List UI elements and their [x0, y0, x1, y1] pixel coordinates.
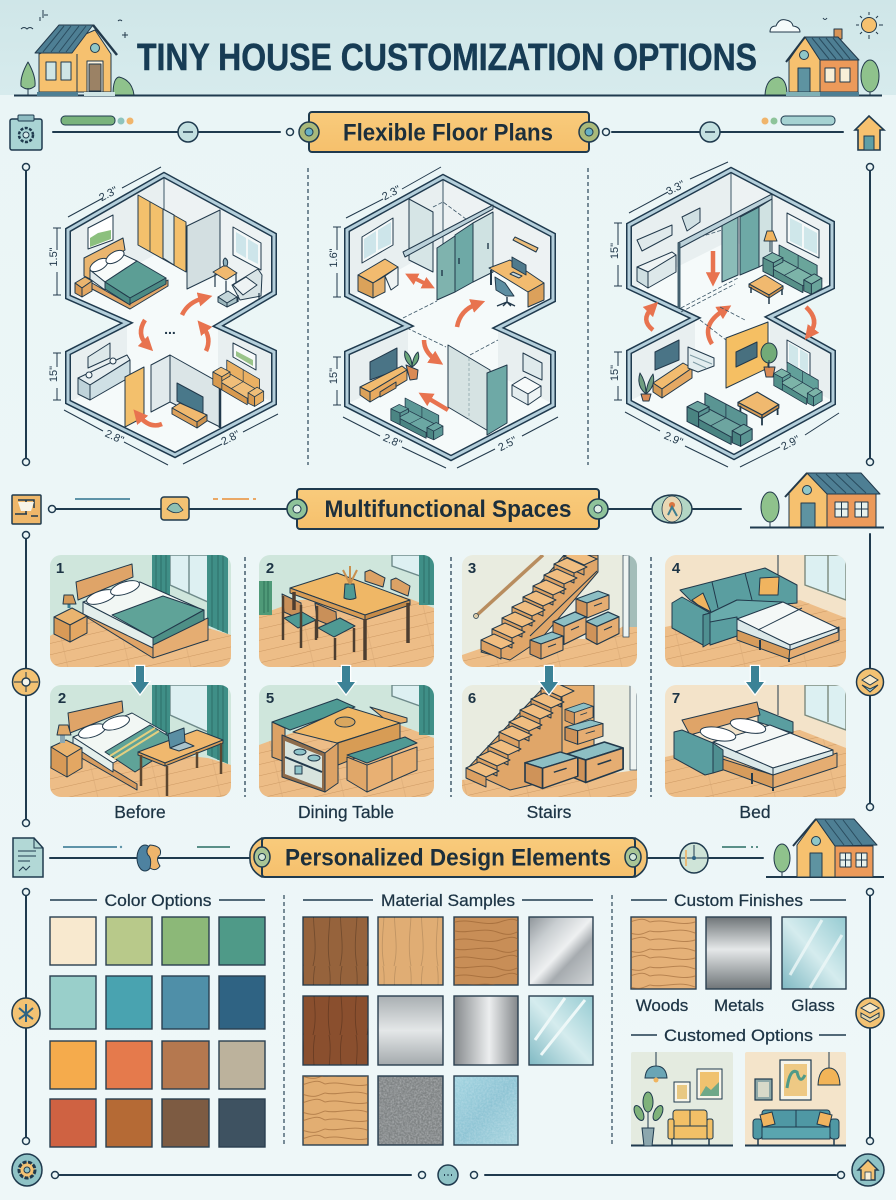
partition with door	[151, 355, 220, 428]
dimensions plan 3: 2.9"	[779, 434, 802, 453]
side table	[213, 258, 237, 292]
footer rail	[12, 1154, 884, 1186]
floor plan 1	[48, 167, 278, 465]
window	[233, 227, 261, 270]
stair body	[481, 555, 598, 660]
panel captions: Before	[114, 802, 166, 822]
painting	[88, 215, 113, 249]
heading: Customed Options: Customed Options	[664, 1026, 813, 1045]
panel captions: Stairs	[527, 802, 572, 822]
back partition	[409, 199, 433, 272]
window	[362, 218, 393, 263]
panel 2: bed with desk	[50, 685, 231, 797]
painting lower	[233, 343, 256, 370]
wall tv	[655, 340, 679, 370]
heading: Material Samples: Material Samples	[381, 891, 515, 910]
back chairs	[365, 570, 410, 596]
dimensions plan 1: 1.5"	[48, 247, 60, 267]
nightstand	[54, 595, 87, 642]
pendant lamp	[818, 1052, 840, 1085]
icon: small house	[855, 116, 884, 150]
base and mattress	[699, 716, 837, 791]
finish labels	[636, 996, 835, 1015]
header band	[0, 0, 896, 96]
color swatches	[50, 917, 265, 1147]
transformation arrows	[131, 666, 764, 694]
stool	[218, 291, 237, 307]
panel 4: dining table storage: 5	[266, 690, 274, 707]
dimensions plan 2	[328, 167, 558, 468]
panel 4: dining table storage	[259, 685, 434, 797]
drawers	[530, 591, 619, 659]
floor plan 3	[609, 162, 839, 467]
icon: document	[13, 838, 43, 877]
medallion: dots	[438, 1165, 458, 1185]
finish labels: Woods	[636, 996, 688, 1015]
treads	[466, 682, 574, 787]
guide dashes	[403, 202, 498, 355]
plant left	[639, 373, 654, 401]
dimensions plan 2: 2.8"	[381, 432, 404, 451]
panel 7: sofa	[665, 555, 846, 667]
dimensions plan 1: 15"	[48, 366, 60, 382]
tv	[172, 383, 207, 428]
dimensions plan 2: 1.6"	[328, 248, 340, 268]
heading: Color Options: Color Options	[104, 891, 212, 910]
panel captions: Dining Table	[298, 802, 394, 822]
window lower	[787, 340, 810, 377]
frames	[674, 1069, 722, 1102]
title: TINY HOUSE CUSTOMIZATION OPTIONS	[137, 37, 757, 79]
panel 7: sofa: 4	[672, 560, 681, 577]
medallion: color blob	[137, 845, 161, 871]
sofa upper	[763, 245, 822, 294]
medallion left	[161, 497, 189, 520]
big sofa	[687, 393, 752, 446]
medallion: left compass	[12, 668, 40, 696]
sofa	[668, 1110, 713, 1145]
finish labels: Glass	[791, 996, 835, 1015]
side rails: design elements	[12, 888, 884, 1145]
side rails: spaces	[12, 532, 884, 826]
banner: Personalized Design Elements: Personalized Design Elements	[285, 844, 611, 872]
icon: house and tree	[750, 473, 884, 528]
panel captions	[114, 802, 771, 822]
dimensions plan 3: 3.3"	[664, 179, 687, 198]
dividers and side rails: floor plans	[22, 164, 874, 466]
banner: Multifunctional Spaces: Multifunctional Spaces	[324, 496, 572, 523]
frames	[755, 1060, 811, 1100]
front chair	[315, 603, 355, 660]
mirror and vanity	[512, 353, 542, 405]
dimensions plan 3: 15"	[609, 243, 621, 259]
bed	[76, 564, 208, 658]
medallion: right layers	[856, 998, 884, 1028]
teal sofa	[391, 398, 443, 440]
panel 6: stairs open: 6	[468, 690, 476, 707]
sofa lower right	[774, 362, 822, 406]
room scene: cream	[745, 1052, 846, 1146]
armchair	[232, 269, 262, 302]
panel 5: stairs: 3	[468, 560, 476, 577]
desk	[138, 728, 223, 796]
panel 1: bed before	[50, 555, 231, 667]
accent partition	[726, 322, 768, 388]
rotation arrows: ...	[164, 321, 176, 337]
vase	[343, 566, 357, 600]
orange sofa	[213, 360, 264, 406]
pendant lamp	[645, 1052, 667, 1082]
kitchen	[637, 208, 700, 288]
sliding doors	[678, 194, 772, 312]
partition	[187, 210, 220, 289]
panel 8: sofa bed: 7	[672, 690, 680, 707]
finish swatches	[631, 917, 846, 989]
medallion: left leaf	[12, 998, 40, 1028]
dimensions plan 2: 15"	[328, 368, 340, 384]
sofa	[672, 568, 797, 647]
dimensions plan 1: 2.8"	[219, 429, 242, 448]
plant	[632, 1092, 665, 1146]
dimensions plan 3: 15"	[609, 365, 621, 381]
treads	[481, 550, 597, 659]
material samples	[303, 917, 593, 1145]
banner: Personalized Design Elements	[250, 838, 647, 877]
icon: floor plan tile	[12, 495, 41, 524]
section band: Multifunctional Spaces	[12, 473, 884, 529]
dimensions plan 3: 2.9"	[662, 430, 685, 449]
plant right	[761, 343, 777, 377]
medallion: compass dial	[680, 843, 708, 873]
icon: left house	[21, 10, 134, 96]
vanity	[78, 343, 130, 400]
finish labels: Metals	[714, 996, 764, 1015]
dimensions plan 1	[48, 167, 278, 465]
panel 3: dining table: 2	[266, 560, 274, 577]
panel 1: bed before: 1	[56, 560, 64, 577]
backrest	[682, 702, 793, 735]
slider beam	[403, 205, 493, 257]
panel captions: Bed	[739, 802, 771, 822]
panel 8: sofa bed	[665, 685, 846, 797]
stair body	[468, 690, 562, 790]
banner: Multifunctional Spaces	[287, 489, 608, 529]
shelf unit	[282, 735, 338, 792]
icon: home	[852, 1154, 884, 1186]
arrows plan 3	[646, 251, 814, 344]
icon: clipboard gear	[10, 115, 42, 150]
plant	[405, 351, 419, 380]
nightstand	[51, 725, 82, 777]
coffee table lower	[738, 392, 779, 425]
drawers	[525, 703, 623, 788]
window	[787, 213, 819, 258]
office chair	[495, 277, 515, 306]
back bench	[272, 699, 355, 762]
sofa	[753, 1110, 839, 1145]
bed	[84, 238, 168, 309]
glass shelf	[688, 347, 714, 372]
arrows plan 2	[412, 277, 480, 410]
front bench	[347, 737, 417, 792]
handrail	[474, 555, 543, 618]
icon: gear	[12, 1154, 42, 1186]
tv and stand	[360, 348, 407, 402]
table	[290, 573, 410, 660]
medallion: right layers	[856, 668, 884, 696]
icon: house and tree	[766, 819, 884, 877]
rotation arrows	[139, 298, 208, 425]
sliding doors	[437, 212, 493, 300]
dimensions plan 2: 2.3"	[380, 184, 403, 203]
bed	[68, 701, 180, 790]
dimensions plan 1: 2.8"	[103, 428, 126, 447]
floor plan 2	[328, 167, 558, 468]
right desk	[489, 237, 544, 307]
lower partition	[448, 345, 507, 435]
sliding door	[125, 367, 144, 427]
tv stand	[653, 363, 692, 398]
panel 3: dining table	[259, 555, 434, 667]
panel 2: bed with desk: 2	[58, 690, 66, 707]
section band: Personalized Design Elements	[13, 819, 884, 877]
table top	[293, 707, 407, 765]
panel 6: stairs open	[462, 682, 637, 797]
room scene: green	[631, 1052, 733, 1146]
icon: right house	[765, 12, 883, 96]
banner: Flexible Floor Plans: Flexible Floor Plans	[343, 120, 553, 146]
dimensions plan 2: 2.5"	[496, 435, 519, 454]
left chair	[282, 594, 316, 648]
nightstand	[75, 277, 92, 297]
panel 5: stairs	[462, 550, 637, 667]
dimensions plan 1: 2.3"	[97, 185, 120, 204]
section band: Flexible Floor Plans	[10, 112, 884, 152]
pull-out mattress	[737, 602, 839, 662]
coffee table upper	[749, 275, 783, 304]
dimensions plan 3	[609, 162, 839, 467]
medallion right	[652, 495, 692, 523]
lamp	[764, 231, 777, 252]
wardrobe	[138, 195, 186, 272]
arm	[674, 730, 713, 775]
banner: Flexible Floor Plans	[299, 112, 599, 152]
left desk	[358, 259, 398, 298]
heading: Custom Finishes: Custom Finishes	[674, 891, 803, 910]
